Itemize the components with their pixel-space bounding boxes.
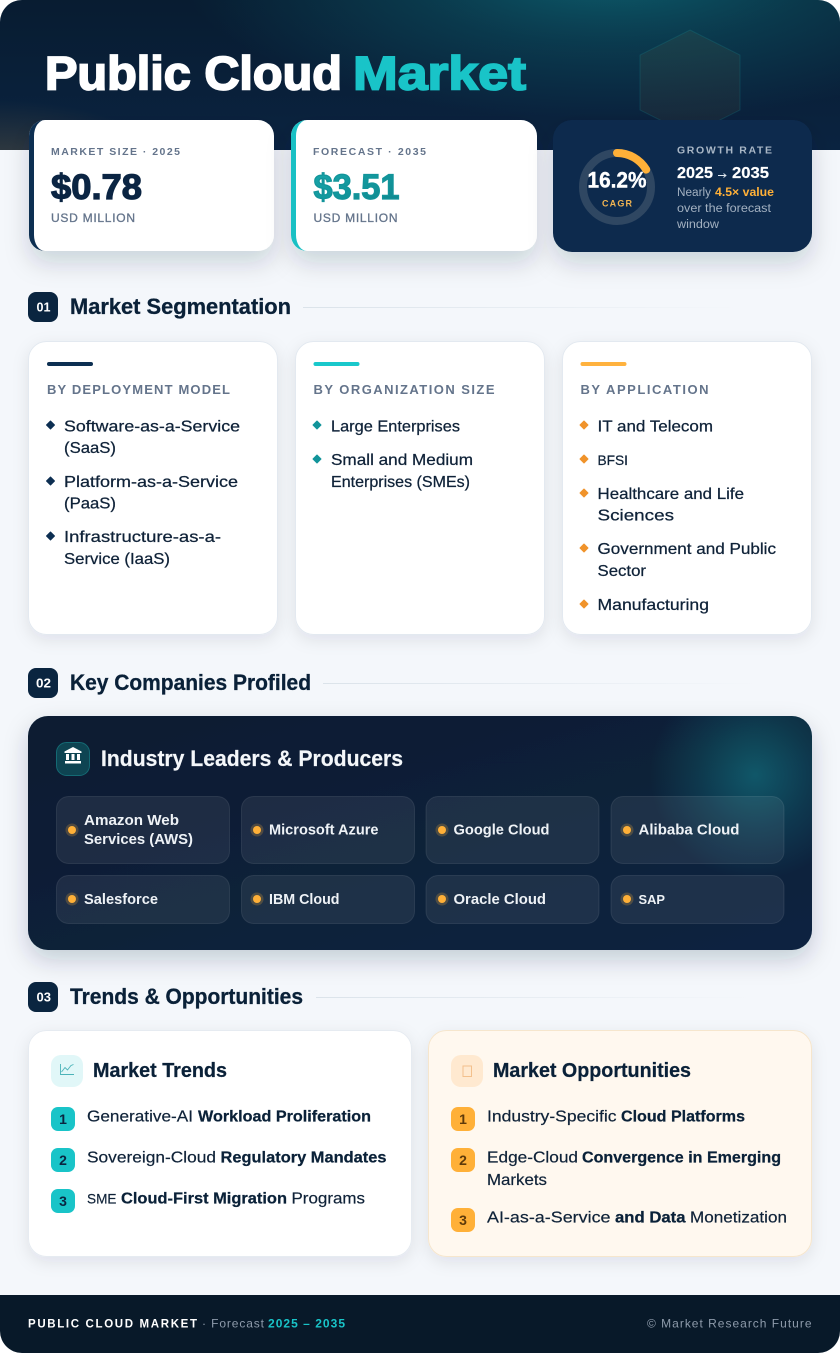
chip: Google Cloud: Google Cloud <box>454 822 550 838</box>
chip: AWS: Amazon Web <box>84 813 179 829</box>
panel: by application: Government and Public <box>598 541 776 558</box>
panel: by application: BFSI <box>598 452 628 468</box>
opportunity 1 <box>451 1107 745 1131</box>
section heading 02: 02 <box>36 676 51 690</box>
opportunity 3: and Data <box>615 1210 686 1226</box>
stat card: forecast <box>291 120 537 251</box>
icon: missing glyph box <box>451 1055 483 1087</box>
decorative hexagon <box>640 30 740 120</box>
chip: Microsoft Azure <box>242 796 414 864</box>
chip: Oracle Cloud <box>426 876 599 924</box>
trend 3: SME <box>87 1190 116 1206</box>
opportunity 2 <box>451 1148 781 1189</box>
growth rate text <box>676 144 774 231</box>
chip: Alibaba Cloud <box>611 796 784 864</box>
trend 2: Regulatory Mandates <box>220 1150 387 1166</box>
stat card: market size <box>29 120 274 251</box>
panel heading: Industry Leaders & Producers <box>101 746 403 771</box>
growth rate text: 4.5× value <box>715 187 774 199</box>
trend 3 <box>51 1189 365 1213</box>
trend 2: 2 <box>59 1152 67 1168</box>
section heading 01 <box>28 292 740 322</box>
title: Public Cloud <box>45 46 342 100</box>
growth rate text: 2035 <box>732 165 769 182</box>
trend 1: Workload Proliferation <box>198 1108 371 1126</box>
footer: · Forecast <box>202 1316 265 1330</box>
stat card: forecast: $3.51 <box>314 168 400 207</box>
section heading 03: Trends & Opportunities <box>70 984 303 1009</box>
panel: by deployment model: Platform-as-a-Service <box>64 474 238 491</box>
panel: by deployment model: (PaaS) <box>64 496 116 512</box>
opportunity 3: AI-as-a-Service <box>487 1210 611 1226</box>
stat card: forecast: USD MILLION <box>314 211 398 225</box>
section heading 02 <box>28 668 760 698</box>
footer: © Market Research Future <box>647 1316 812 1330</box>
section heading 03 <box>28 982 753 1012</box>
panel: industry leaders <box>28 716 812 950</box>
opportunity 2: 2 <box>459 1152 467 1168</box>
chip: Oracle Cloud: Oracle Cloud <box>454 892 546 908</box>
panel: by application: BY APPLICATION <box>580 382 708 397</box>
title <box>45 46 526 100</box>
panel: by organization size: Small and Medium <box>331 452 473 469</box>
chip: AWS: Services (AWS) <box>84 832 193 848</box>
panel: by application: Manufacturing <box>598 597 709 614</box>
stat card: growth rate <box>553 120 812 252</box>
section heading 03: 03 <box>36 990 51 1004</box>
stat card: market size: MARKET SIZE · 2025 <box>51 146 180 158</box>
CAGR ring gauge <box>583 153 651 221</box>
chip: Salesforce <box>56 876 230 924</box>
CAGR ring gauge: CAGR <box>602 198 632 208</box>
header banner <box>0 0 840 150</box>
chip: SAP: SAP <box>638 892 665 907</box>
chip: IBM Cloud: IBM Cloud <box>269 892 340 908</box>
CAGR ring gauge: 16.2% <box>588 168 646 192</box>
icon: line chart <box>51 1055 83 1087</box>
trend 1 <box>51 1107 371 1131</box>
trend 1: 1 <box>59 1111 67 1127</box>
stat card: forecast: FORECAST · 2035 <box>313 146 426 158</box>
panel: by organization size: Enterprises (SMEs) <box>331 474 470 491</box>
panel: by deployment model: Infrastructure-as-a- <box>64 529 221 546</box>
section heading 02: Key Companies Profiled <box>70 670 311 695</box>
panel: by organization size: BY ORGANIZATION SIZE <box>314 382 495 397</box>
chip: SAP <box>611 876 784 924</box>
title: Market <box>353 46 526 100</box>
chip: AWS <box>56 796 230 864</box>
growth rate text: window <box>676 219 720 231</box>
trend 2: Sovereign-Cloud <box>87 1150 216 1166</box>
trend 3: 3 <box>59 1193 67 1209</box>
footer <box>0 1295 840 1353</box>
panel: by application: IT and Telecom <box>598 418 713 436</box>
trends heading: Market Trends <box>93 1060 227 1082</box>
panel: by deployment model: BY DEPLOYMENT MODEL <box>47 382 230 397</box>
chip: IBM Cloud <box>242 876 414 924</box>
opportunity 3 <box>451 1208 787 1232</box>
trend 2 <box>51 1148 387 1172</box>
panel: by organization size <box>296 342 544 634</box>
panel: by deployment model: (SaaS) <box>64 440 116 457</box>
opportunities heading: Market Opportunities <box>493 1060 691 1082</box>
chip: Google Cloud <box>426 796 599 864</box>
panel: by deployment model: Service (IaaS) <box>64 551 170 568</box>
stat card: market size: $0.78 <box>51 168 142 207</box>
chip: Microsoft Azure: Microsoft Azure <box>269 822 378 838</box>
panel: market opportunities <box>428 1030 812 1256</box>
trend 1: Generative-AI <box>87 1108 193 1126</box>
growth rate text: over the forecast <box>677 203 772 215</box>
opportunity 3: Monetization <box>690 1210 787 1226</box>
opportunity 3: 3 <box>459 1212 467 1228</box>
opportunity 2: Convergence in Emerging <box>582 1150 781 1166</box>
chip: Alibaba Cloud: Alibaba Cloud <box>638 822 740 838</box>
trend 3: Cloud-First Migration <box>121 1190 287 1208</box>
panel: by deployment model <box>28 342 278 634</box>
growth rate text: 2025 <box>677 165 713 182</box>
footer: 2025 – 2035 <box>268 1316 345 1330</box>
growth rate text: Nearly <box>677 187 711 199</box>
growth rate text: GROWTH RATE <box>677 144 772 156</box>
panel: by application: Sciences <box>598 508 674 524</box>
section heading 01: 01 <box>36 300 50 314</box>
panel: by application <box>562 342 812 634</box>
opportunity 1: Cloud Platforms <box>621 1108 745 1126</box>
opportunity 2: Edge-Cloud <box>487 1150 578 1166</box>
section heading 01: Market Segmentation <box>70 294 291 319</box>
opportunity 2: Markets <box>487 1172 547 1189</box>
opportunity 1: Industry-Specific <box>487 1108 616 1126</box>
panel: by organization size: Large Enterprises <box>331 418 460 436</box>
chip: Salesforce: Salesforce <box>84 892 158 908</box>
panel: by application: Sector <box>598 563 647 580</box>
panel: market trends <box>28 1030 412 1256</box>
opportunity 1: 1 <box>459 1111 467 1127</box>
panel: by application: Healthcare and Life <box>598 486 744 503</box>
icon: bank building <box>56 742 90 776</box>
trend 3: Programs <box>292 1190 365 1208</box>
footer: PUBLIC CLOUD MARKET <box>28 1318 197 1330</box>
panel: by deployment model: Software-as-a-Service <box>64 418 240 436</box>
stat card: market size: USD MILLION <box>51 211 135 225</box>
